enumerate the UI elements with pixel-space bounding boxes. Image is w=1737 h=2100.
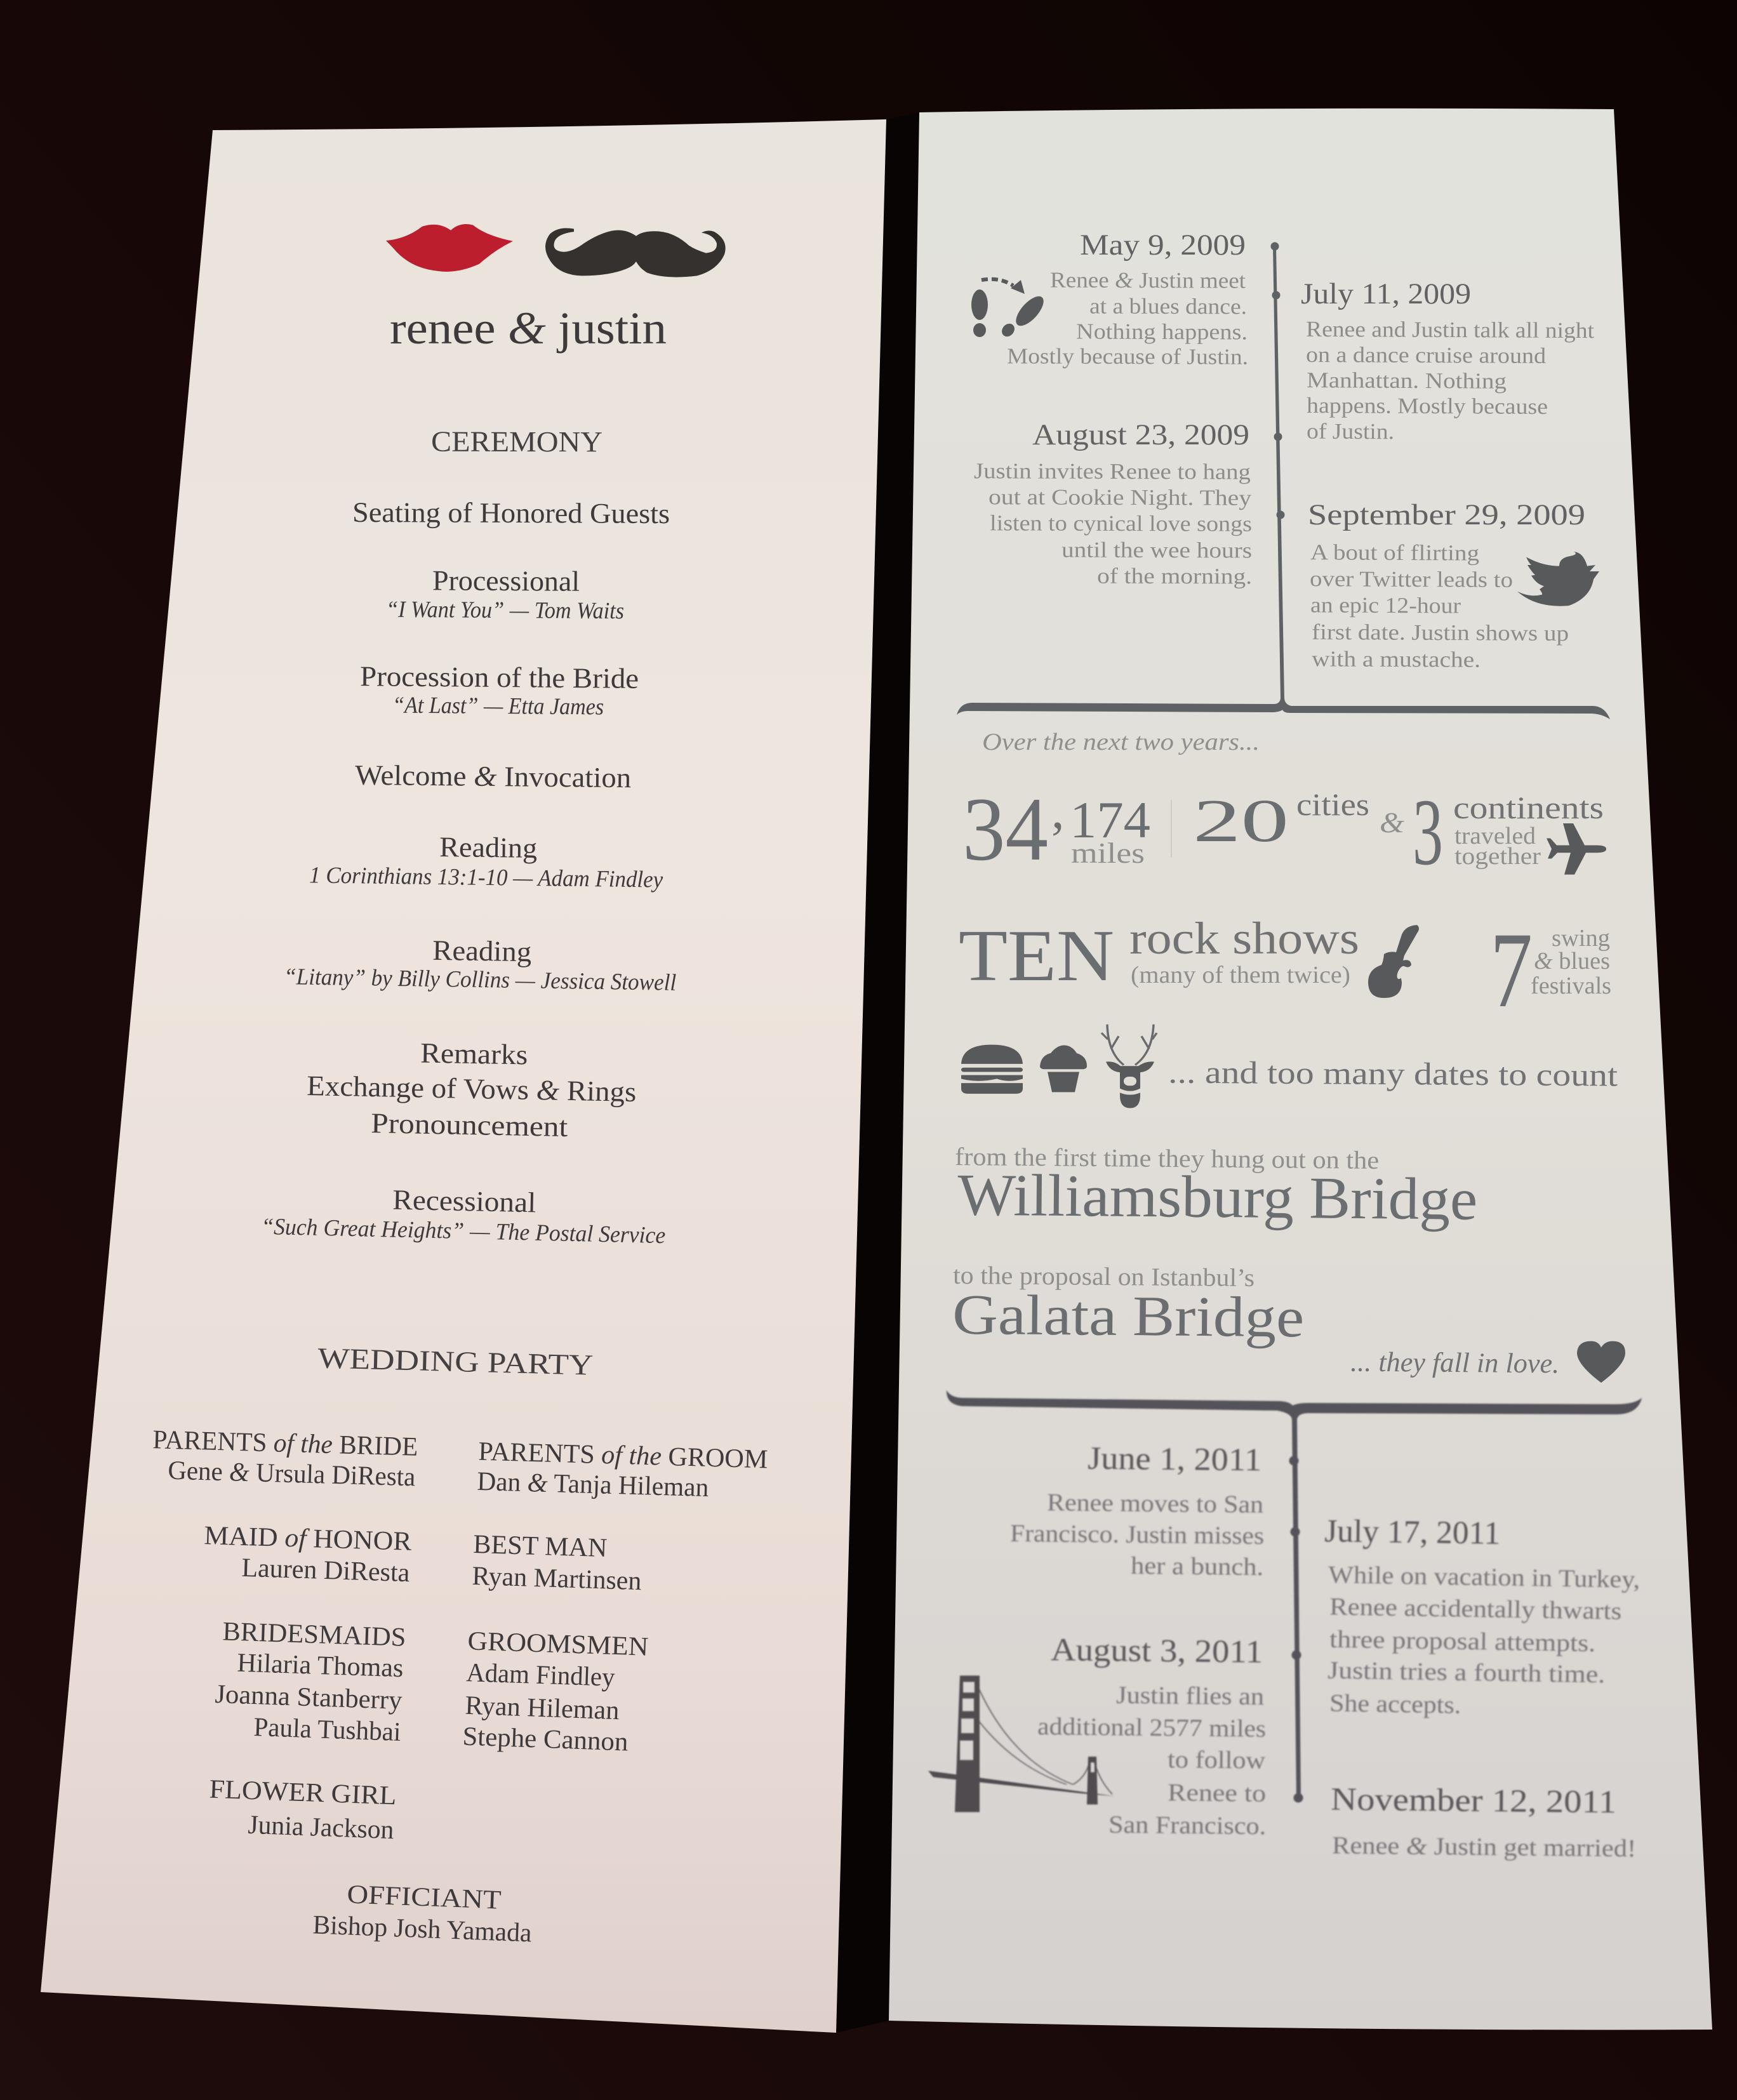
text block: bride's side of wedding party <box>152 1425 418 1845</box>
icon: dance footprints <box>971 279 1048 339</box>
event: November 12, 2011: Renee & Justin get married! <box>1332 1831 1636 1863</box>
event: August 23, 2009: of the morning. <box>1097 564 1252 588</box>
text block: Galata Bridge: Galata Bridge <box>952 1284 1305 1349</box>
text block: order of service: 1 Corinthians 13:1-10 — Adam Findley <box>309 862 663 893</box>
event: November 12, 2011: November 12, 2011 <box>1331 1782 1616 1820</box>
event: July 17, 2011: Justin tries a fourth time. <box>1328 1657 1606 1688</box>
icon: twitter bird <box>1517 552 1599 606</box>
stat: 3 continents traveled together <box>1413 780 1604 885</box>
event: July 11, 2009: Manhattan. Nothing <box>1307 368 1507 394</box>
event: July 17, 2011 <box>1324 1513 1640 1719</box>
stat: 7 swing and blues festivals <box>1490 910 1611 1030</box>
event: July 11, 2009: Renee and Justin talk all night <box>1306 317 1594 343</box>
event: July 17, 2011: She accepts. <box>1329 1689 1461 1719</box>
event: June 1, 2011: Francisco. Justin misses <box>1010 1520 1264 1550</box>
text block: bride's side of wedding party: MAID of HONOR <box>204 1521 412 1557</box>
text block: bride's side of wedding party: Junia Jackson <box>248 1811 394 1845</box>
event: September 29, 2009: with a mustache. <box>1312 646 1481 672</box>
icon: black mustache <box>545 228 726 277</box>
text block: bride's side of wedding party: Paula Tushbai <box>253 1713 401 1747</box>
icon: red lips <box>386 224 513 272</box>
event: July 17, 2011: Renee accidentally thwarts <box>1329 1593 1622 1625</box>
text block: officiant: Bishop Josh Yamada <box>312 1910 533 1948</box>
text block: bride's side of wedding party: FLOWER GIRL <box>209 1775 397 1811</box>
event: August 3, 2011 <box>1037 1632 1266 1840</box>
event: August 23, 2009: August 23, 2009 <box>1032 418 1249 451</box>
event: August 23, 2009 <box>974 418 1252 588</box>
event: May 9, 2009: at a blues dance. <box>1089 294 1247 319</box>
icon: heart <box>1577 1341 1625 1383</box>
stat: 34,174 miles: , <box>1051 781 1064 839</box>
timeline spine and bar <box>947 1390 1642 1798</box>
event: August 23, 2009: out at Cookie Night. They <box>988 484 1252 510</box>
event: August 23, 2009: listen to cynical love songs <box>990 510 1252 536</box>
event: June 1, 2011: Renee moves to San <box>1047 1489 1263 1519</box>
text block: groom's side of wedding party: PARENTS of the GROOM <box>478 1437 768 1474</box>
timeline spine and bar <box>957 246 1610 719</box>
text block: bride's side of wedding party: Lauren DiResta <box>241 1553 410 1588</box>
event: June 1, 2011: her a bunch. <box>1131 1552 1263 1581</box>
event: July 11, 2009: on a dance cruise around <box>1306 342 1547 368</box>
event: July 17, 2011: July 17, 2011 <box>1324 1513 1501 1552</box>
text block: order of service: Procession of the Bride <box>360 660 639 694</box>
event: July 17, 2011: three proposal attempts. <box>1329 1626 1596 1657</box>
stat: ten rock shows <box>959 913 1359 996</box>
event: July 11, 2009 <box>1301 277 1594 444</box>
text block: order of service: Reading <box>432 934 532 967</box>
stat: 3 continents traveled together: 3 <box>1413 780 1443 885</box>
stat: ten rock shows: rock shows <box>1129 913 1359 964</box>
text block: order of service: Welcome & Invocation <box>355 759 631 794</box>
text block: order of service: “Litany” by Billy Collins — Jessica Stowell <box>284 964 676 996</box>
stat: 7 swing and blues festivals: festivals <box>1531 973 1611 999</box>
stat: 3 continents traveled together: continents <box>1453 790 1604 825</box>
stat: 20 cities: cities <box>1296 787 1369 822</box>
event: July 17, 2011: While on vacation in Turkey, <box>1328 1561 1640 1593</box>
text block: Galata Bridge <box>952 1261 1305 1349</box>
stat: 20 cities: & <box>1380 806 1404 839</box>
text block: Williamsburg Bridge: from the first time they hung out on the <box>955 1142 1379 1174</box>
text block: order of service: Seating of Honored Guests <box>352 496 670 529</box>
event: May 9, 2009: May 9, 2009 <box>1080 229 1246 262</box>
stat: 20 cities: 20 <box>1193 787 1289 854</box>
text block: order of service <box>261 496 676 1249</box>
event: May 9, 2009: Nothing happens. <box>1076 319 1248 344</box>
event: September 29, 2009: over Twitter leads to <box>1310 566 1513 592</box>
heading: ceremony: CEREMONY <box>431 425 602 458</box>
event: August 3, 2011: to follow <box>1168 1746 1265 1774</box>
stat: 34,174 miles <box>962 779 1150 879</box>
text block: groom's side of wedding party: BEST MAN <box>473 1530 608 1563</box>
icon: airplane <box>1547 823 1606 875</box>
text block: groom's side of wedding party: Ryan Martinsen <box>472 1562 642 1596</box>
icon: golden gate bridge <box>928 1675 1115 1812</box>
text block: order of service: Reading <box>439 831 537 864</box>
text block: bride's side of wedding party: Gene & Ursula DiResta <box>168 1456 416 1492</box>
text block: order of service: “At Last” — Etta James <box>392 693 604 720</box>
text block: officiant <box>312 1880 533 1948</box>
stat: 3 continents traveled together: traveled <box>1454 823 1536 849</box>
stat: 34,174 miles: 174 <box>1070 791 1150 849</box>
timeline dots <box>1289 1456 1303 1803</box>
event: May 9, 2009 <box>1007 229 1248 369</box>
event: November 12, 2011 <box>1331 1782 1636 1863</box>
event: August 3, 2011: additional 2577 miles <box>1037 1713 1266 1743</box>
text block: bride's side of wedding party: BRIDESMAIDS <box>222 1617 406 1652</box>
panel: love story infographic card <box>889 109 1712 2030</box>
text: and too many dates to count: ... and too many dates to count <box>1168 1054 1618 1093</box>
event: August 3, 2011: Renee to <box>1168 1779 1266 1807</box>
title: renee & justin: renee & justin <box>390 303 667 354</box>
card sheet <box>889 109 1712 2030</box>
text block: groom's side of wedding party: GROOMSMEN <box>467 1626 649 1662</box>
stat: 34,174 miles: 34 <box>962 779 1048 879</box>
text block: bride's side of wedding party: Hilaria Thomas <box>237 1649 404 1683</box>
event: July 11, 2009: of Justin. <box>1307 419 1394 444</box>
event: August 3, 2011: San Francisco. <box>1108 1811 1266 1840</box>
text block: Galata Bridge: to the proposal on Istanbul’s <box>953 1261 1254 1292</box>
event: June 1, 2011 <box>1010 1441 1264 1581</box>
text block: order of service: “Such Great Heights” — The Postal Service <box>261 1214 666 1249</box>
event: August 3, 2011: August 3, 2011 <box>1051 1632 1263 1670</box>
event: July 11, 2009: happens. Mostly because <box>1307 393 1548 419</box>
text block: groom's side of wedding party: Ryan Hileman <box>465 1691 620 1725</box>
text block: order of service: “I Want You” — Tom Waits <box>386 597 624 624</box>
text block: groom's side of wedding party: Adam Findley <box>466 1658 615 1692</box>
text block: order of service: Pronouncement <box>371 1107 568 1143</box>
text: over the next two years: Over the next two years... <box>982 729 1260 755</box>
event: August 23, 2009: Justin invites Renee to hang <box>974 458 1251 484</box>
timeline: 2011 <box>928 1390 1642 1863</box>
stat: 7 swing and blues festivals: 7 <box>1490 910 1533 1030</box>
icon: muffin <box>1040 1045 1087 1092</box>
text block: order of service: Processional <box>432 564 580 597</box>
event: September 29, 2009: A bout of flirting <box>1310 540 1479 566</box>
text block: bride's side of wedding party: Joanna Stanberry <box>215 1680 403 1715</box>
text block: officiant: OFFICIANT <box>347 1880 502 1915</box>
text block: bride's side of wedding party: PARENTS of the BRIDE <box>152 1425 418 1462</box>
stat: 7 swing and blues festivals: & blues <box>1534 948 1610 974</box>
event: September 29, 2009: September 29, 2009 <box>1308 498 1585 531</box>
stat: 3 continents traveled together: together <box>1454 843 1541 870</box>
text block: order of service: Recessional <box>392 1184 536 1218</box>
panel: ceremony programme card <box>41 119 886 2033</box>
stat: ten rock shows: (many of them twice) <box>1131 962 1350 988</box>
event: June 1, 2011: June 1, 2011 <box>1088 1441 1261 1478</box>
text block: groom's side of wedding party: Stephe Cannon <box>462 1722 629 1757</box>
timeline: 2009 <box>957 229 1610 719</box>
event: September 29, 2009 <box>1308 498 1585 672</box>
event: May 9, 2009: Mostly because of Justin. <box>1007 343 1248 369</box>
timeline dots <box>1271 243 1285 519</box>
event: August 3, 2011: Justin flies an <box>1116 1682 1264 1710</box>
text block: Williamsburg Bridge: Williamsburg Bridge <box>957 1162 1478 1233</box>
card sheet <box>41 119 886 2033</box>
stat divider <box>1171 800 1172 858</box>
stat: 20 cities <box>1193 787 1404 854</box>
event: September 29, 2009: an epic 12-hour <box>1310 592 1461 618</box>
text: they fall in love: ... they fall in love. <box>1350 1346 1559 1379</box>
stat: 7 swing and blues festivals: swing <box>1552 925 1610 952</box>
text block: groom's side of wedding party: Dan & Tanja Hileman <box>477 1467 709 1503</box>
stat: 34,174 miles: miles <box>1071 837 1145 869</box>
icon: deer head <box>1101 1025 1157 1108</box>
text block: groom's side of wedding party <box>462 1437 768 1757</box>
text block: order of service: Exchange of Vows & Rings <box>307 1070 637 1108</box>
stat: ten rock shows: TEN <box>959 915 1114 996</box>
icon: burger <box>961 1045 1023 1094</box>
text block: order of service: Remarks <box>420 1037 528 1070</box>
heading: wedding party: WEDDING PARTY <box>317 1341 594 1381</box>
icon: electric guitar <box>1368 925 1419 998</box>
event: August 23, 2009: until the wee hours <box>1062 537 1252 563</box>
event: September 29, 2009: first date. Justin shows up <box>1312 620 1569 646</box>
event: July 11, 2009: July 11, 2009 <box>1301 277 1471 310</box>
event: May 9, 2009: Renee & Justin meet <box>1050 267 1246 293</box>
